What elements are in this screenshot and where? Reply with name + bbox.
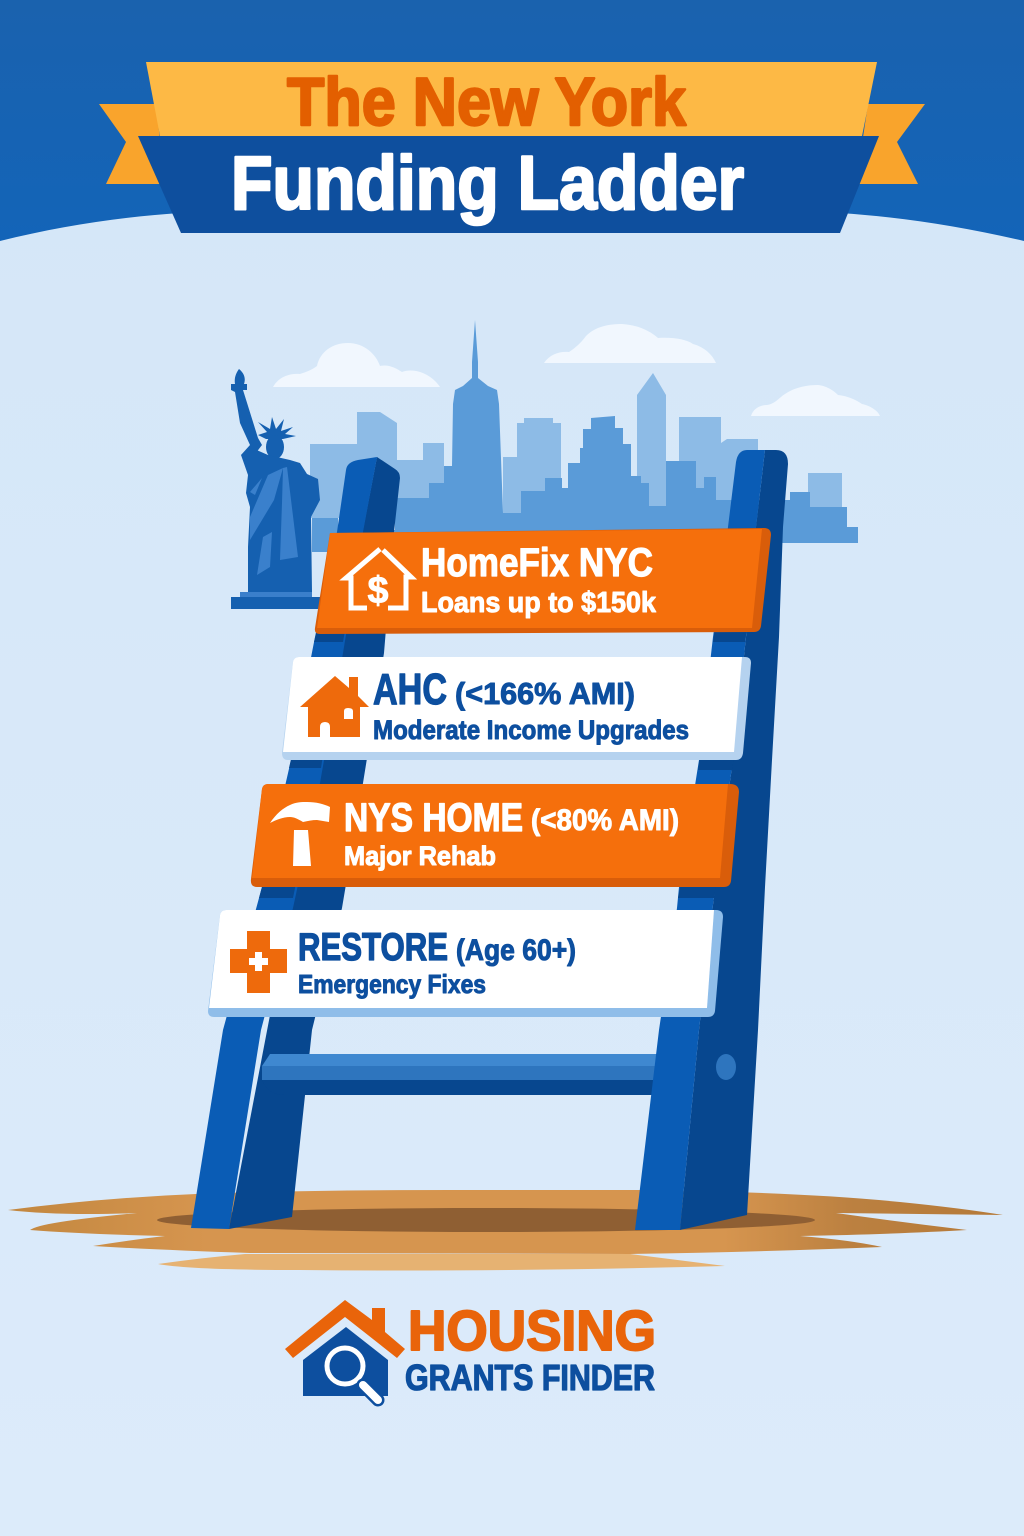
bottom rung	[262, 1054, 660, 1095]
subheading: Loans up to $150k	[421, 587, 657, 619]
skyline	[310, 320, 858, 552]
pedestal top	[240, 592, 312, 597]
ladder left rail	[191, 457, 400, 1229]
left rail card shadows	[259, 630, 345, 898]
rung 1: HomeFix NYC	[315, 528, 771, 634]
ribbon tail right	[856, 104, 925, 184]
yellow banner	[146, 62, 877, 136]
left rail front	[191, 457, 377, 1229]
right rail front	[635, 450, 765, 1230]
ground dark shadow	[157, 1208, 815, 1232]
subheading: Moderate Income Upgrades	[373, 715, 689, 745]
robe folds	[250, 467, 298, 575]
card face	[317, 529, 762, 628]
robe	[241, 448, 320, 592]
card edge	[315, 528, 771, 634]
heading: HomeFix NYC	[421, 541, 653, 585]
ladder right rail	[635, 450, 788, 1230]
logo	[285, 1299, 656, 1400]
ground	[8, 1190, 1003, 1270]
ribbon tail left	[99, 104, 165, 184]
title line 2: Funding Ladder	[231, 141, 744, 226]
qualifier: (<166% AMI)	[455, 676, 635, 711]
title banner	[99, 62, 925, 233]
qualifier: (<80% AMI)	[531, 804, 679, 837]
card face	[209, 910, 714, 1008]
crown	[258, 417, 296, 439]
left rail side	[229, 457, 400, 1229]
card edge	[282, 657, 751, 760]
rung underside	[262, 1080, 657, 1095]
ground patch	[8, 1190, 1003, 1254]
rung front face	[262, 1066, 660, 1080]
icon: medical cross	[230, 931, 287, 993]
rung top face	[262, 1054, 660, 1066]
card edge	[251, 784, 739, 887]
heading: NYS HOME	[344, 796, 523, 840]
title line 1: The New York	[287, 64, 686, 140]
clouds	[273, 324, 880, 416]
subheading: Major Rehab	[344, 841, 496, 871]
logo magnifier	[327, 1348, 378, 1400]
rail bolt	[716, 1054, 736, 1080]
pedestal	[231, 597, 320, 609]
blue banner	[138, 136, 879, 233]
card face	[283, 657, 742, 752]
main skyline mass	[312, 320, 858, 552]
icon: hammer	[270, 802, 330, 866]
logo word 2: GRANTS FINDER	[405, 1357, 655, 1398]
qualifier: (Age 60+)	[456, 934, 576, 967]
logo house body	[303, 1327, 388, 1396]
subheading: Emergency Fixes	[298, 969, 486, 999]
header band	[0, 0, 1024, 241]
cloud middle	[544, 324, 716, 363]
cloud right	[751, 385, 880, 416]
rung 4: RESTORE	[208, 910, 723, 1017]
head	[266, 435, 284, 459]
heading: AHC	[373, 665, 447, 714]
rung 2: AHC	[282, 657, 751, 760]
ground light shadow	[158, 1254, 725, 1270]
right rail card shadows	[678, 628, 747, 898]
right rail side	[680, 450, 788, 1230]
light buildings	[310, 373, 842, 518]
logo word 1: HOUSING	[408, 1299, 656, 1363]
icon: house with dollar	[346, 549, 411, 612]
cloud left	[273, 343, 440, 387]
card face	[252, 784, 728, 878]
torch and arm	[231, 369, 262, 458]
statue of liberty	[231, 369, 320, 609]
heading: RESTORE	[298, 926, 448, 969]
logo roof	[285, 1300, 405, 1358]
icon: house with dollar: $	[368, 570, 388, 612]
card edge	[208, 910, 723, 1017]
icon: house	[300, 676, 369, 737]
rung 3: NYS HOME	[251, 784, 739, 887]
